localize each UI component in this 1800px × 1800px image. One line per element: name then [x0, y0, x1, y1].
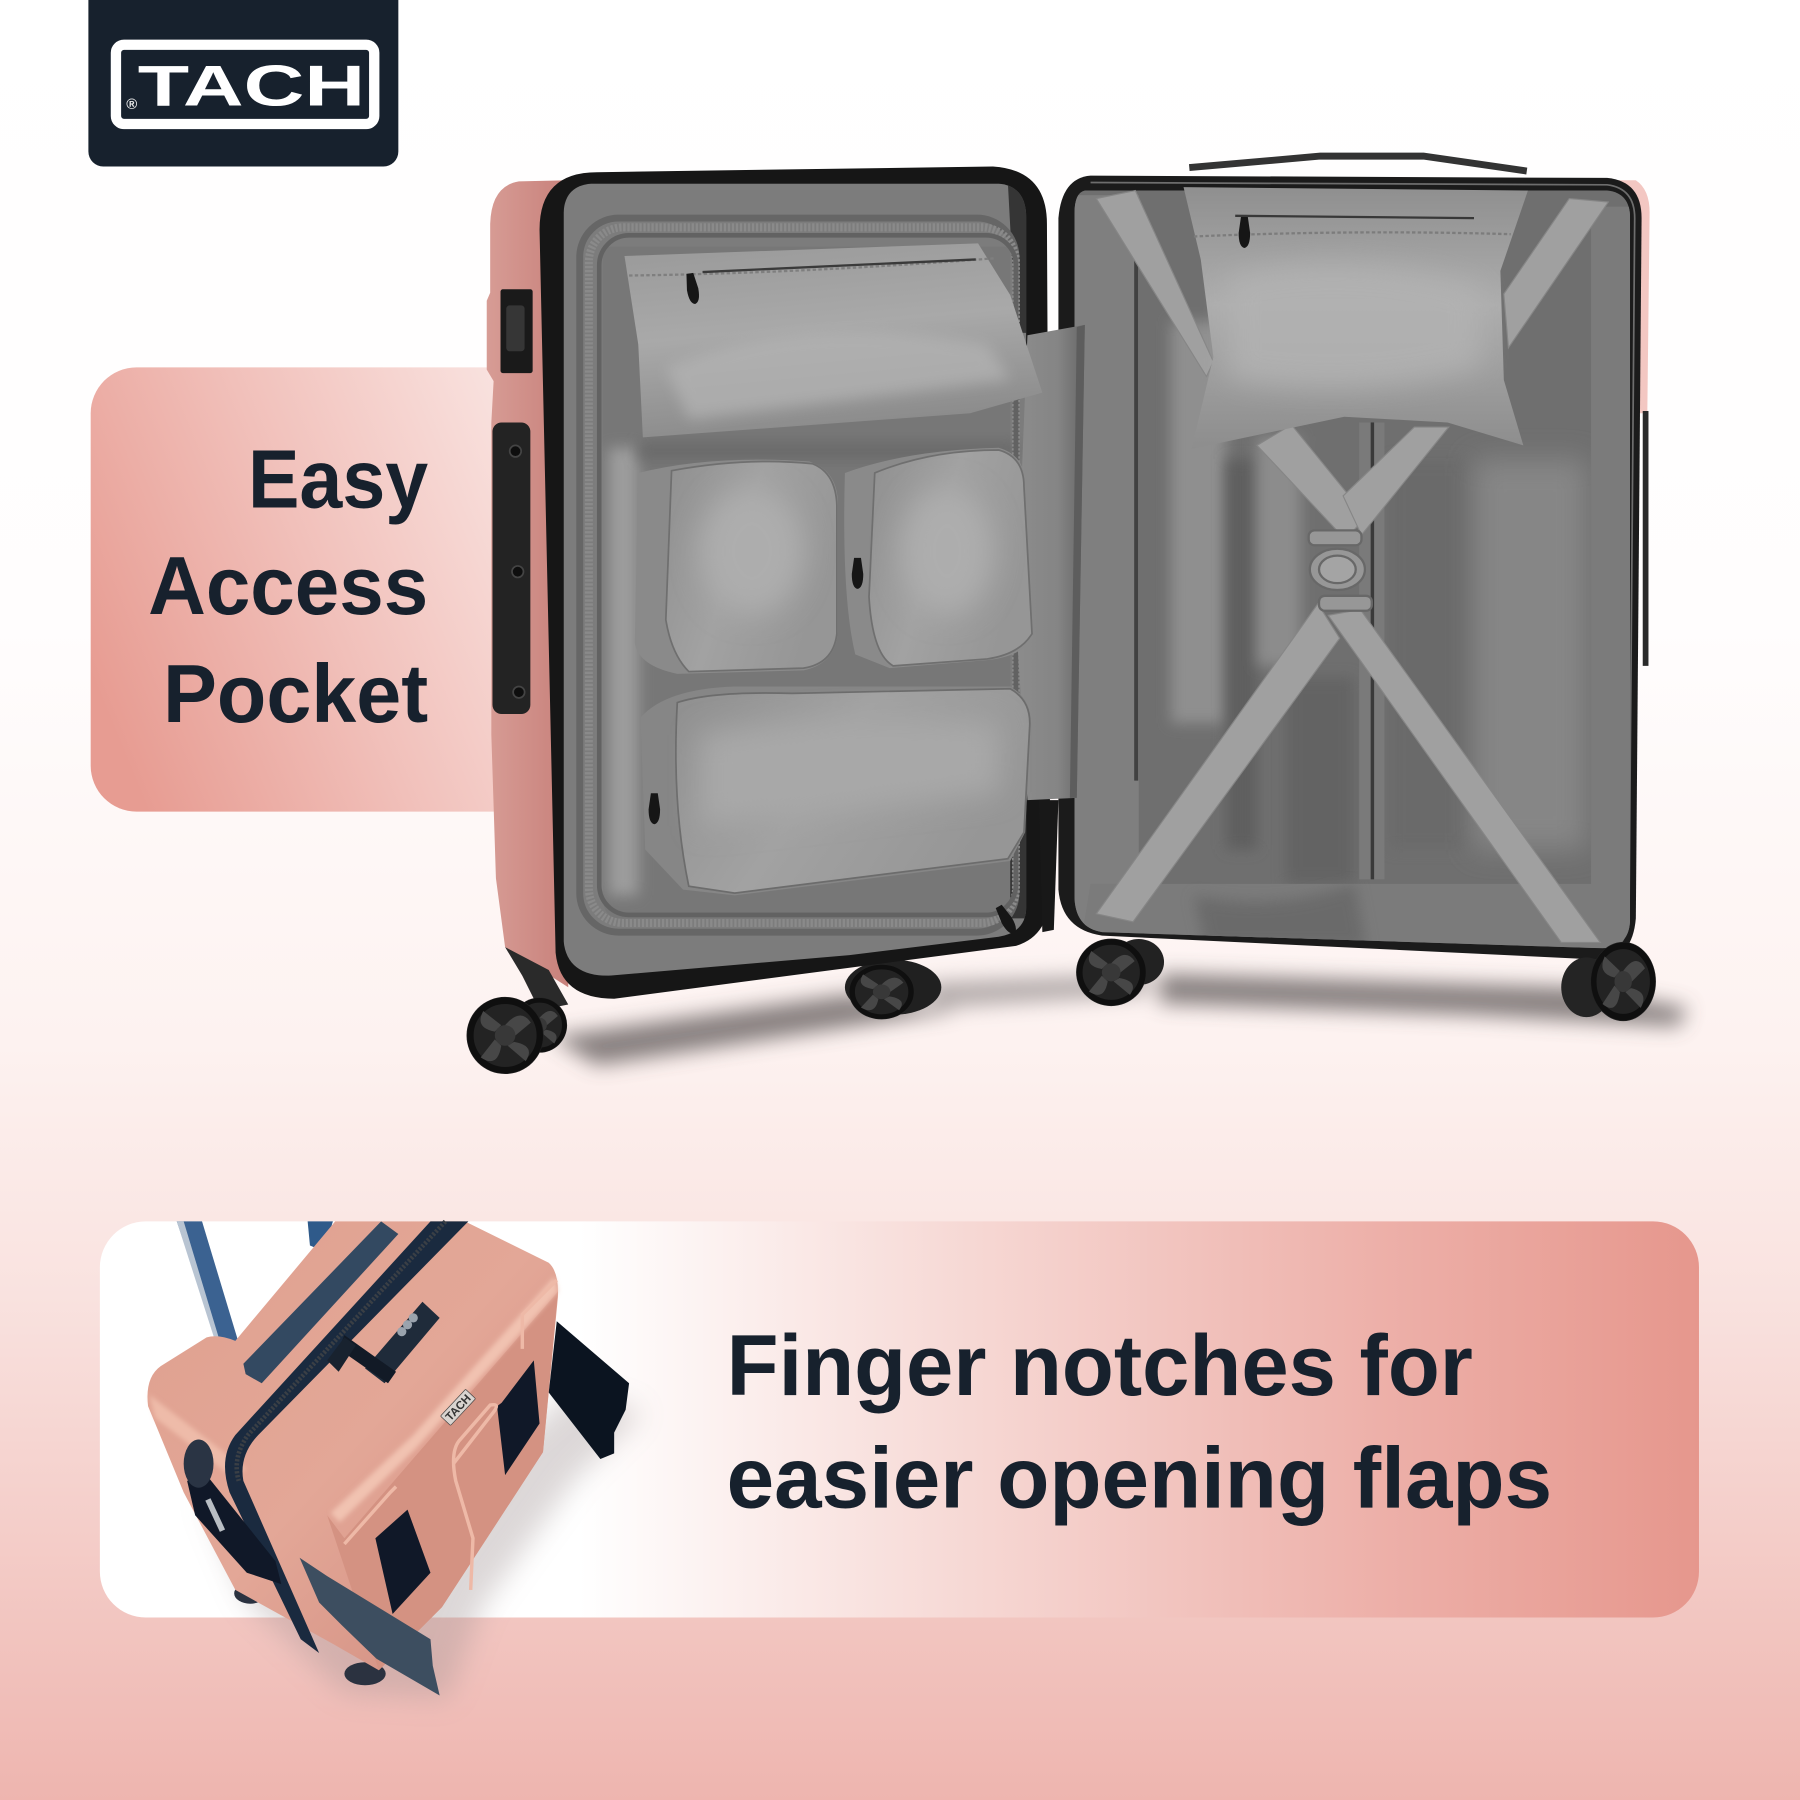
pocket: top pillow [624, 243, 1042, 437]
lower flap [300, 1558, 440, 1696]
left shell [487, 180, 568, 987]
strap buckle [1309, 530, 1372, 611]
cross straps [1096, 191, 1608, 942]
zip track frame [580, 218, 1016, 932]
side latch [501, 289, 533, 373]
raised flap, right [549, 1321, 629, 1459]
left lining [560, 179, 1031, 983]
callout panel: easy access pocket: Access [148, 539, 428, 632]
callout panel: easy access pocket [91, 367, 550, 812]
black notch patches [187, 1360, 540, 1614]
rear hinge flap [1016, 325, 1085, 800]
wheels: right half [1076, 939, 1656, 1021]
centre seam [1359, 422, 1384, 879]
pocket: bottom [641, 686, 1031, 895]
floor shadow [551, 973, 1688, 1065]
callout panel: easy access pocket: Pocket [163, 647, 428, 740]
closed suitcase photo [147, 1221, 643, 1699]
callout panel: finger notches [100, 1221, 1699, 1617]
right half frame [1058, 156, 1650, 960]
callout panel: finger notches: Finger notches for [727, 1318, 1473, 1414]
shell ridges [344, 1280, 557, 1590]
right face shading [327, 1291, 558, 1670]
corner highlight [331, 1277, 558, 1522]
open suitcase [467, 156, 1656, 1074]
wheels: left half [467, 947, 941, 1074]
suitcase shadow [201, 1389, 643, 1699]
left frame [540, 166, 1050, 999]
floor [1079, 884, 1630, 953]
lower zip pull [994, 904, 1019, 936]
rose body [147, 1221, 558, 1670]
combination lock [327, 1302, 440, 1383]
wheels of closed case [234, 1583, 386, 1685]
logo badge: ® [126, 96, 137, 113]
pocket: middle right [844, 448, 1033, 668]
side grip plate [492, 422, 530, 714]
callout panel: easy access pocket: Easy [248, 432, 428, 525]
pocket: middle left [635, 460, 838, 674]
hinge strip [1039, 800, 1058, 932]
brand plate: TACH [444, 1393, 474, 1424]
logo badge: TACH [138, 55, 365, 119]
zipper seam [225, 1221, 468, 1653]
top grip [243, 1221, 398, 1383]
logo badge [88, 0, 398, 166]
telescopic handle [177, 1221, 344, 1360]
callout panel: finger notches: easier opening flaps [727, 1430, 1552, 1526]
lock knob on side [184, 1440, 225, 1532]
right lining and folds [1068, 184, 1642, 959]
pillow pocket [1184, 187, 1528, 449]
